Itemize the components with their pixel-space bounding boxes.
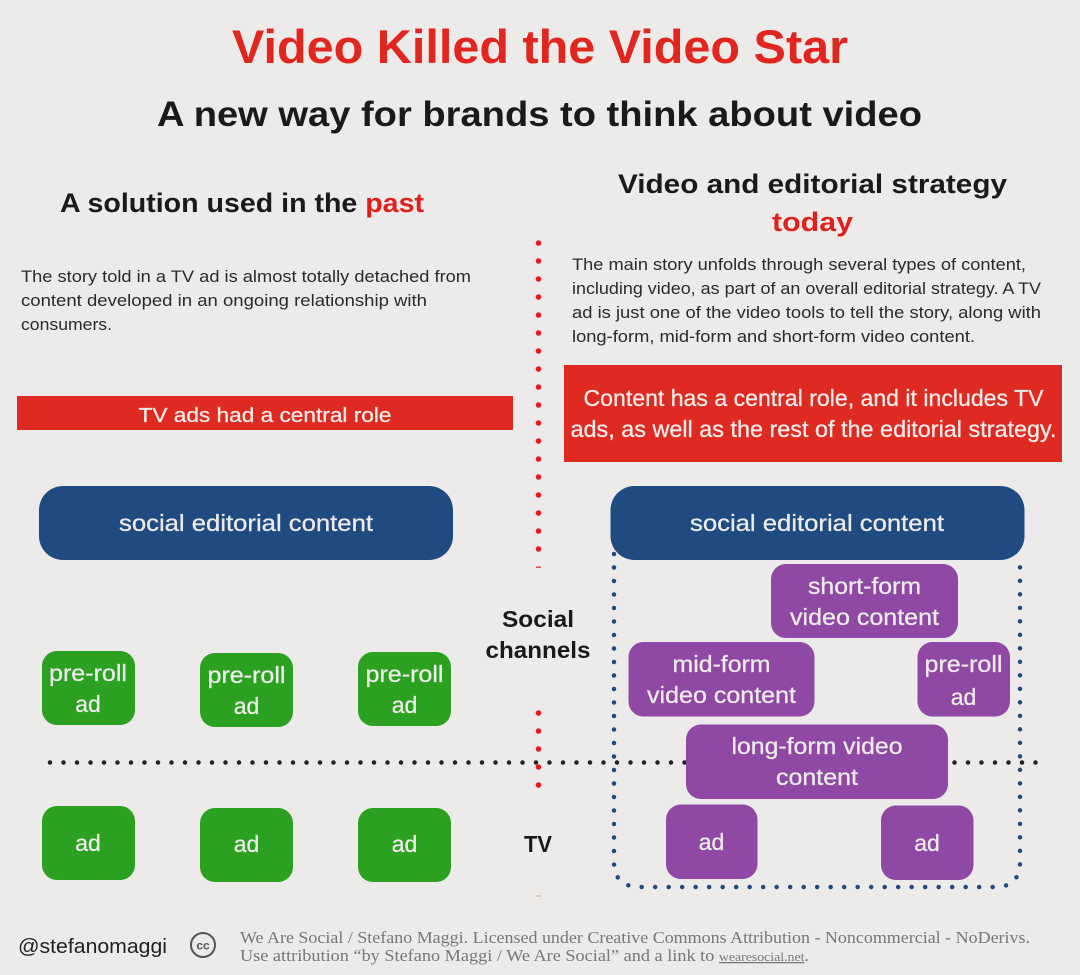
past social editorial content — [39, 486, 453, 560]
handle: @stefanomaggi — [18, 935, 167, 958]
past ad 3 — [358, 808, 451, 882]
today red banner — [564, 365, 1062, 462]
today social editorial content: social editorial content — [690, 510, 945, 536]
mid-form video content — [628, 642, 814, 716]
past description: consumers. — [21, 316, 112, 334]
panel: today — [564, 169, 1062, 887]
today red banner: ads, as well as the rest of the editorial strategy. — [570, 416, 1056, 442]
license text: We Are Social / Stefano Maggi. Licensed under Creative Commons Attribution - Noncommercial - NoDerivs. — [240, 928, 1030, 947]
today description: including video, as part of an overall editorial strategy. A TV — [572, 280, 1041, 298]
today description: ad is just one of the video tools to tell the story, along with — [572, 304, 1041, 322]
past pre-roll ad 3 — [358, 652, 451, 726]
today pre-roll ad — [918, 642, 1010, 716]
today pre-roll ad: pre-roll — [924, 651, 1002, 677]
divider: red vertical dotted lower — [536, 713, 541, 786]
past pre-roll ad 2: pre-roll — [208, 662, 286, 688]
past red banner: TV ads had a central role — [138, 405, 392, 427]
past description — [21, 268, 471, 334]
past pre-roll ad 2 — [200, 653, 293, 727]
blue dotted bracket — [614, 554, 1020, 887]
mid-form video content: mid-form — [672, 651, 770, 677]
past pre-roll ad 1 — [42, 651, 135, 725]
past ad 2 — [200, 808, 293, 882]
past pre-roll ad 2: ad — [234, 693, 259, 719]
subtitle: A new way for brands to think about video — [157, 95, 922, 134]
past pre-roll ad 3: pre-roll — [366, 661, 444, 687]
long-form video content — [686, 724, 948, 799]
today ad 1: ad — [699, 829, 724, 855]
divider: black horizontal dotted — [50, 760, 1038, 765]
today description: The main story unfolds through several types of content, — [572, 256, 1026, 274]
past heading: A solution used in the past — [60, 188, 424, 218]
past red banner — [17, 396, 513, 430]
past description: The story told in a TV ad is almost totally detached from — [21, 268, 471, 286]
panel: past — [17, 188, 513, 882]
today ad 2: ad — [914, 830, 940, 856]
past ad 2: ad — [234, 831, 259, 857]
icon: creative commons: cc — [196, 938, 210, 952]
divider fragment: red lower end — [536, 896, 540, 897]
row label: social channels: Social — [502, 606, 574, 632]
today ad 2 — [881, 806, 974, 880]
row label: social channels: channels — [486, 637, 590, 663]
license text — [240, 928, 1030, 965]
past ad 1: ad — [75, 830, 101, 856]
past ad 3: ad — [392, 831, 417, 857]
past description: content developed in an ongoing relationship with — [21, 292, 427, 310]
today ad 1 — [666, 804, 758, 879]
divider fragment: red upper end — [536, 566, 541, 568]
past pre-roll ad 3: ad — [392, 692, 417, 718]
icon: creative commons — [191, 933, 215, 957]
past pre-roll ad 1: ad — [75, 691, 101, 717]
mid-form video content: video content — [647, 682, 797, 708]
divider: red vertical dotted upper — [536, 243, 541, 560]
today heading — [618, 169, 1007, 237]
short-form video content: short-form — [808, 573, 921, 599]
title: Video Killed the Video Star — [232, 20, 848, 73]
long-form video content: content — [776, 764, 859, 790]
past ad 1 — [42, 806, 135, 880]
today description: long-form, mid-form and short-form video content. — [572, 328, 975, 346]
today heading: Video and editorial strategy — [618, 169, 1007, 199]
long-form video content: long-form video — [732, 733, 902, 759]
past social editorial content: social editorial content — [119, 510, 374, 536]
today red banner: Content has a central role, and it includes TV — [584, 385, 1044, 411]
today heading: today — [772, 207, 853, 237]
past pre-roll ad 1: pre-roll — [49, 660, 127, 686]
footer — [18, 928, 1030, 965]
today social editorial content — [610, 486, 1024, 560]
row label: TV: TV — [524, 831, 552, 857]
row label: social channels — [486, 606, 590, 663]
today description — [572, 256, 1041, 346]
license text: Use attribution “by Stefano Maggi / We Are Social” and a link to wearesocial.net . — [240, 946, 809, 965]
short-form video content — [771, 564, 958, 638]
today pre-roll ad: ad — [951, 684, 976, 710]
short-form video content: video content — [790, 604, 940, 630]
